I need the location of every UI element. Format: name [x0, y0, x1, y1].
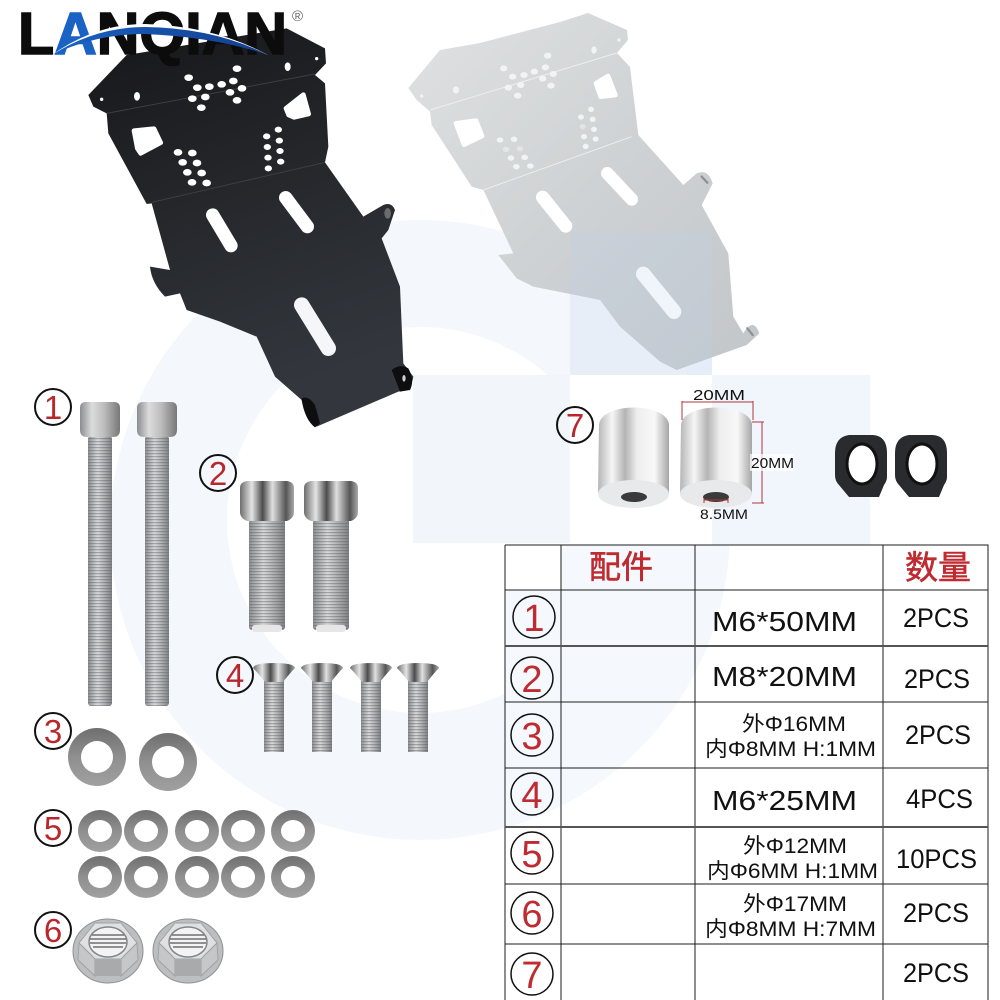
part 4: countersunk bolts	[217, 657, 439, 752]
row 3: 2PCS	[905, 720, 971, 750]
mounting holes and vents	[100, 57, 318, 186]
silver skid plate	[408, 13, 759, 370]
row 6: 6	[521, 894, 543, 936]
part 1: long bolts	[35, 389, 177, 706]
part 5: small washers	[35, 810, 315, 898]
spacer left	[598, 408, 669, 508]
part 7: spacers with dimensions: 20MM	[693, 387, 745, 404]
parts table	[505, 545, 988, 1000]
part 6: flange nuts	[35, 912, 223, 983]
row 3: 3	[521, 716, 543, 758]
spacer right	[680, 408, 752, 508]
number 3: 3	[44, 713, 62, 750]
row 1: M6*50MM	[712, 606, 857, 637]
number 2: 2	[209, 455, 227, 492]
number 1: 1	[44, 389, 62, 426]
number 5: 5	[44, 810, 62, 847]
number 6	[35, 912, 71, 949]
row 3: 内Φ8MM H:1MM	[705, 738, 876, 761]
row 1	[513, 596, 969, 640]
row 5	[511, 832, 977, 883]
number 1	[35, 389, 71, 426]
row 2: 2PCS	[904, 664, 970, 694]
background watermark: pale blue disc and checker squares	[110, 220, 870, 840]
row 4: M6*25MM	[712, 785, 857, 816]
row 5: 5	[521, 834, 543, 876]
outline	[408, 13, 759, 370]
number 2	[200, 455, 236, 492]
number 6: 6	[44, 912, 62, 949]
part 7: spacers with dimensions: 20MM	[751, 455, 794, 472]
row 7	[511, 953, 969, 997]
table header	[589, 549, 971, 586]
part 3: large washers	[35, 713, 197, 791]
dimension lines	[682, 401, 764, 503]
black rubber bushings	[835, 435, 947, 497]
row 2	[511, 657, 970, 701]
row 2: 2	[521, 659, 543, 701]
row 6: 2PCS	[903, 898, 969, 928]
number 7: 7	[566, 407, 584, 444]
table header: 配件	[589, 549, 653, 585]
row 6: 外Φ17MM	[743, 893, 847, 916]
black skid plate	[88, 28, 413, 427]
row 7: 2PCS	[903, 958, 969, 988]
slots	[543, 173, 674, 312]
mounting tabs	[302, 208, 412, 427]
mounting holes and vents	[420, 38, 621, 169]
row 1: 2PCS	[903, 603, 969, 633]
row 4	[511, 773, 973, 817]
number 5	[35, 810, 71, 847]
row 6: 内Φ8MM H:7MM	[705, 918, 876, 941]
row 5: 外Φ12MM	[743, 835, 847, 858]
watermark overlay on silver plate	[570, 232, 712, 375]
row 6	[511, 892, 969, 941]
table grid	[505, 545, 988, 1000]
table header: 数量	[905, 549, 971, 586]
number 7	[557, 407, 593, 444]
logo: LANQIAN: ®	[292, 8, 303, 25]
part 2: short bolts	[200, 455, 358, 632]
part 7: spacers with dimensions: 8.5MM	[700, 506, 748, 522]
row 4: 4	[521, 775, 543, 817]
row 3	[511, 713, 971, 761]
part 7: spacers with dimensions	[557, 387, 794, 522]
number 4	[217, 657, 253, 694]
slots	[213, 198, 328, 348]
row 5: 内Φ6MM H:1MM	[707, 860, 878, 883]
row 2: M8*20MM	[712, 661, 857, 692]
row 3: 外Φ16MM	[742, 713, 846, 736]
row 4: 4PCS	[906, 784, 973, 814]
outline	[88, 28, 413, 427]
row 5: 10PCS	[896, 844, 977, 874]
number 3	[35, 713, 71, 750]
number 4: 4	[226, 657, 244, 694]
logo: LANQIAN: LANQIAN	[18, 1, 287, 67]
row 1: 1	[523, 598, 545, 640]
row 7: 7	[521, 955, 543, 997]
